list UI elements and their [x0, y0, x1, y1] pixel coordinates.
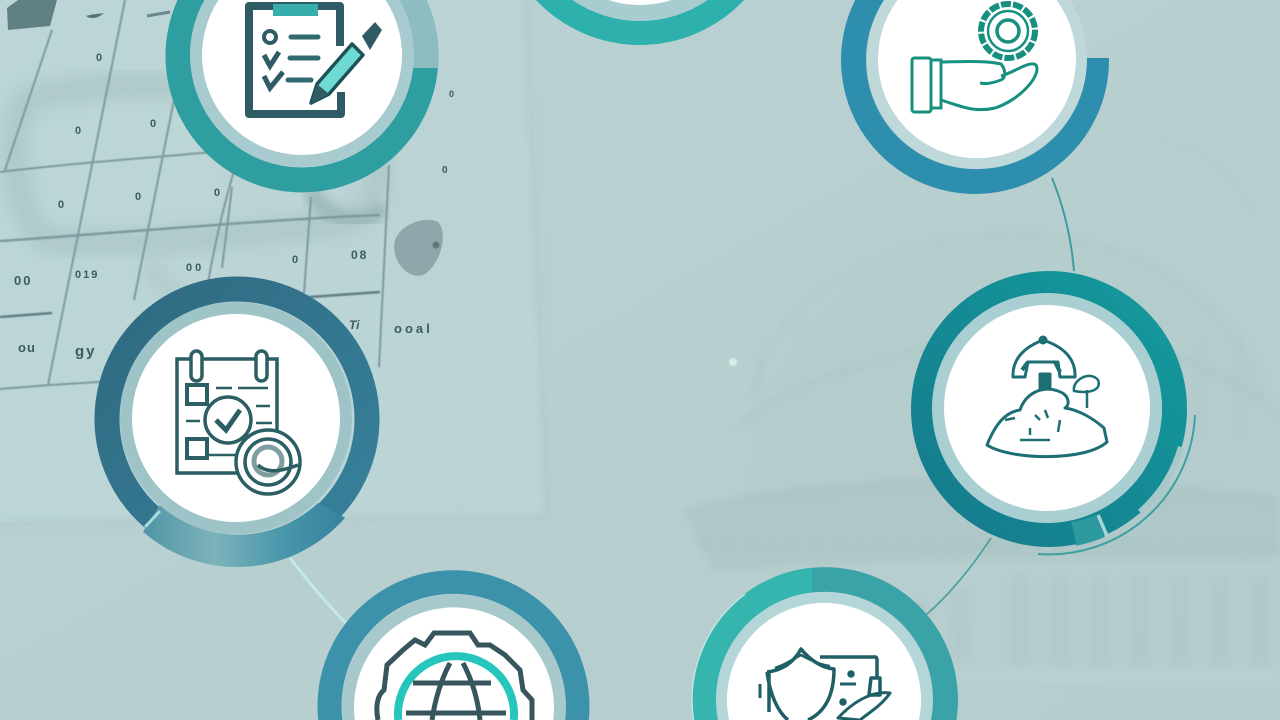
node: top centre partial ring — [536, 0, 744, 45]
calendar dates: 08 — [351, 248, 368, 262]
calendar dates: 0 — [442, 165, 448, 176]
inner disc — [716, 592, 932, 720]
node: calendar with target — [107, 289, 367, 567]
connector: calendar to globe — [290, 558, 346, 623]
calendar dates — [14, 52, 454, 360]
node: hand holding gear — [841, 0, 1109, 194]
inner disc — [126, 308, 346, 528]
icon: dome on island — [987, 337, 1107, 457]
calendar paper — [0, 0, 546, 522]
background: faded capitol building — [684, 135, 1280, 677]
connector: map to shield — [926, 538, 991, 615]
node: globe and gear — [317, 570, 590, 720]
outer orbit arc — [1038, 415, 1195, 554]
calendar dates: 019 — [75, 269, 99, 281]
inner disc — [190, 0, 414, 167]
ring — [692, 567, 958, 720]
calendar dates: 0 — [75, 125, 81, 137]
icon: clipboard with pencil — [249, 4, 382, 114]
icon: calendar checklist — [177, 351, 300, 494]
calendar dates: 0 — [214, 187, 220, 199]
inner disc — [867, 0, 1087, 169]
lower highlight arc — [143, 503, 345, 567]
calendar dates: 00 — [186, 262, 204, 274]
connector: hand to map — [1052, 178, 1074, 271]
calendar dates: ou — [18, 340, 36, 355]
calendar dates: 0 — [292, 254, 298, 266]
ring — [166, 0, 438, 192]
inner disc — [938, 299, 1156, 517]
icon: globe in gear — [377, 633, 532, 720]
calendar dates: ooal — [394, 321, 433, 336]
icon: shield with map — [760, 649, 890, 720]
calendar dates: 00 — [14, 273, 32, 288]
background: calendar sheet — [0, 0, 547, 523]
ring — [924, 284, 1174, 534]
ring — [107, 289, 367, 549]
node: clipboard checklist — [166, 0, 439, 192]
calendar dates: 0 — [58, 199, 64, 211]
sparkle — [729, 358, 737, 366]
node: shield and map — [692, 567, 958, 720]
calendar dates: 0 — [135, 191, 141, 203]
node: dome and island map — [924, 284, 1195, 554]
calendar dates: 0 — [150, 118, 156, 130]
icon: hand and gear — [912, 4, 1037, 112]
calendar pin — [394, 220, 443, 276]
calendar dates: gy — [75, 343, 97, 360]
ring — [317, 570, 590, 720]
calendar dates: 0 — [96, 52, 102, 64]
ring — [841, 0, 1109, 194]
inner disc — [342, 595, 566, 720]
calendar dates: 0 — [449, 89, 454, 99]
calendar dates: Ti — [349, 318, 360, 332]
ring accents — [1074, 526, 1100, 534]
